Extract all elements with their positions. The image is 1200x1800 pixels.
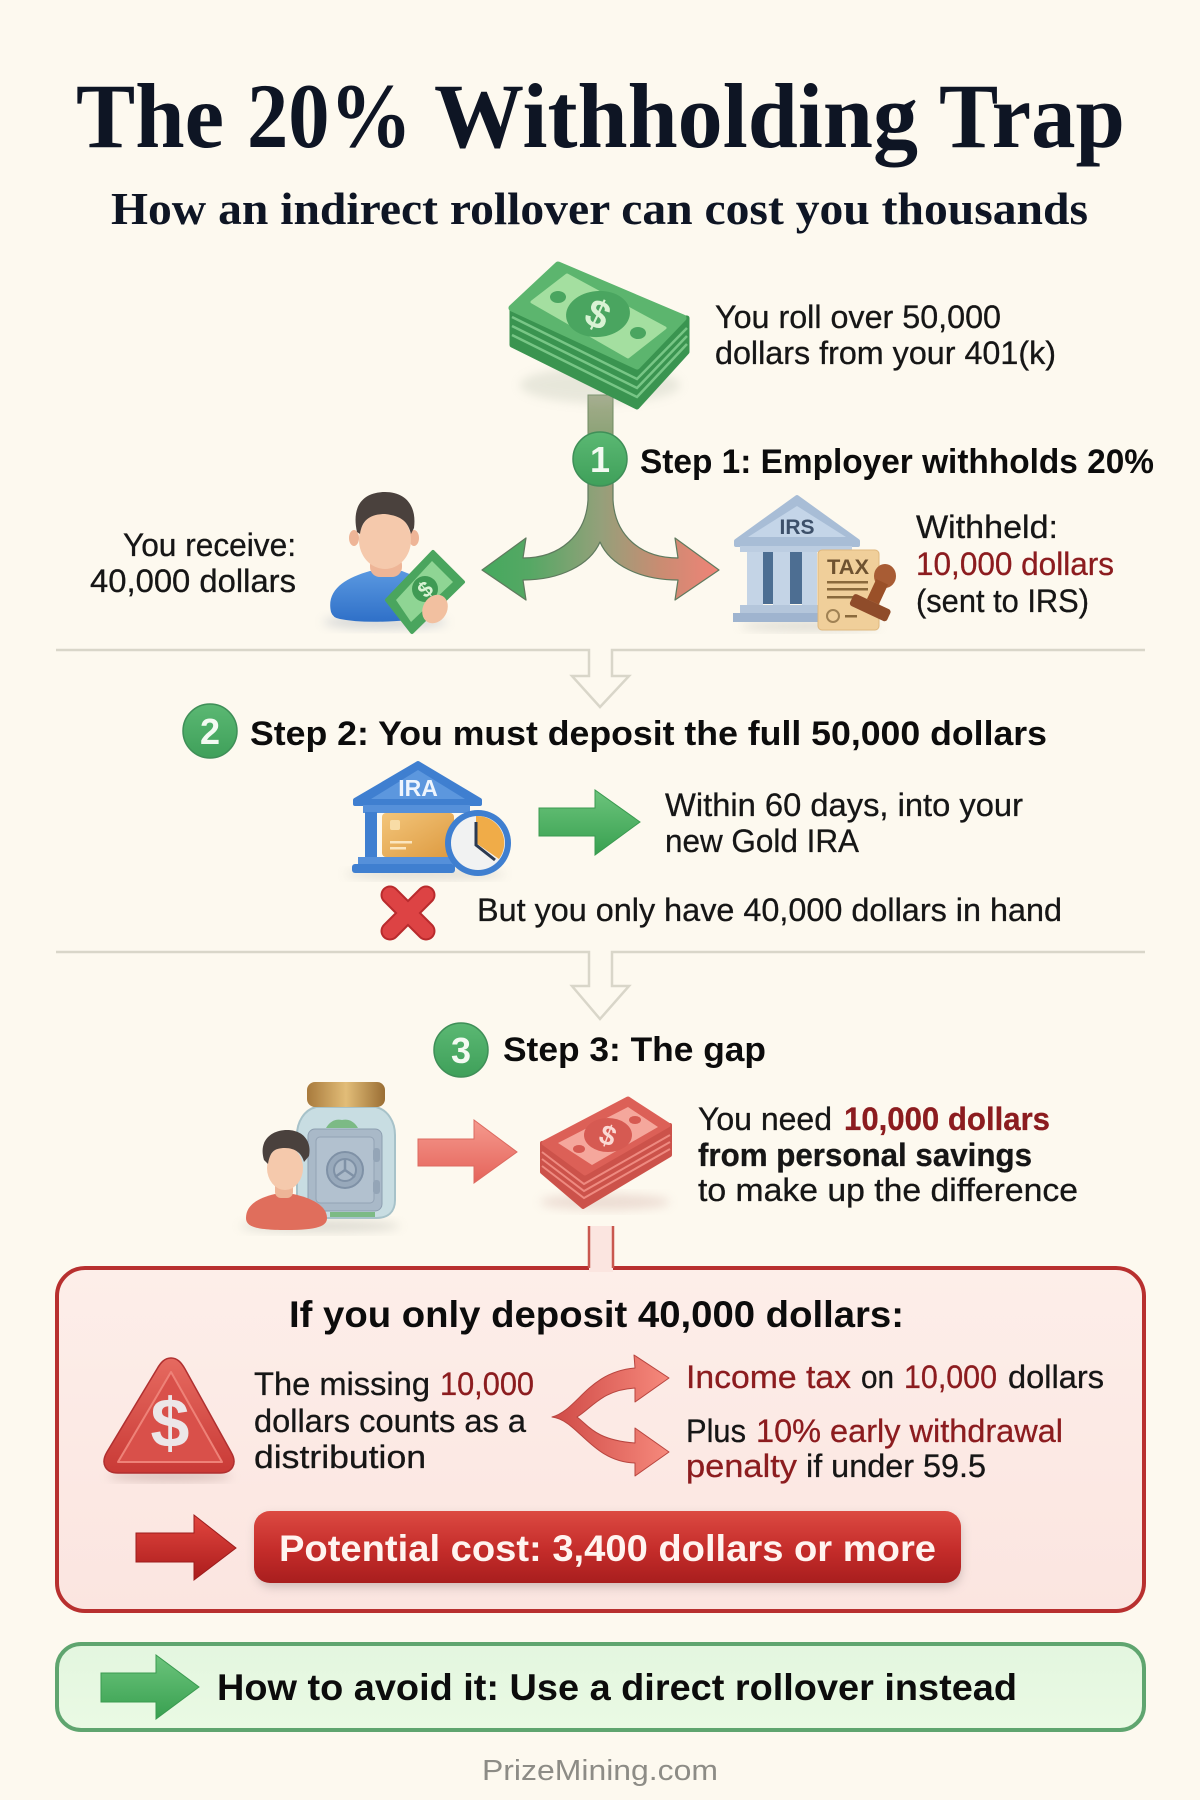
text: you need 10,000: 10,000 dollars (844, 1101, 1050, 1137)
text: withheld: 10,000 dollars (916, 546, 1114, 582)
step 2 heading: Step 2: You must deposit the full 50,000 dollars (250, 715, 1047, 753)
text: withheld: (sent to IRS) (916, 583, 1089, 619)
text: withheld: Withheld: (916, 509, 1058, 545)
title (76, 65, 1125, 167)
safe (308, 1129, 382, 1211)
callout: potential cost button (254, 1511, 961, 1587)
callout: potential cost button: Potential cost: 3,400 dollars or more (279, 1528, 936, 1569)
text: you need 10,000: to make up the difference (698, 1172, 1078, 1208)
text: within 60 days: Within 60 days, into your (665, 787, 1023, 823)
text: missing 10,000: distribution (254, 1439, 426, 1475)
text: direct rollover: How to avoid it: Use a direct rollover instead (217, 1667, 1017, 1708)
arrow: divider 1 with hollow down arrow (56, 650, 1145, 707)
text: roll over: You roll over 50,000 (715, 299, 1001, 335)
clock (445, 810, 511, 876)
text: you need 10,000: from personal savings (698, 1137, 1032, 1173)
icon: IRS building with tax document: IRS (779, 516, 815, 539)
text: you need 10,000 (698, 1101, 1078, 1208)
panel heading: If you only deposit 40,000 dollars: (289, 1294, 904, 1335)
title: The (76, 65, 224, 167)
arrow: divider 2 with hollow down arrow (56, 952, 1145, 1019)
text: early withdrawal penalty (686, 1413, 1063, 1484)
text: within 60 days: new Gold IRA (665, 823, 860, 859)
step 3 badge: 3 (451, 1030, 471, 1071)
step 2 badge (183, 704, 237, 758)
icon: red X (390, 895, 426, 931)
money bill in hand: $ (412, 576, 438, 603)
text: roll over: dollars from your 401(k) (715, 335, 1056, 371)
stamp (849, 564, 896, 622)
arrow: forked red arrows (552, 1355, 669, 1476)
person (246, 1130, 327, 1230)
icon: warning triangle with dollar (104, 1358, 234, 1481)
text: early withdrawal penalty: Plus (686, 1413, 746, 1449)
panel: how to avoid it (57, 1644, 1144, 1730)
arrow: green to IRA (539, 790, 640, 855)
text: missing 10,000: dollars counts as a (254, 1403, 526, 1439)
arrow: dark red (136, 1515, 236, 1580)
title: 20% (247, 65, 412, 167)
arrow: red to money (418, 1120, 517, 1183)
arrow: green (101, 1655, 199, 1719)
panel: if you only deposit 40,000 (57, 1226, 1144, 1611)
icon: IRA bank with card and clock (345, 763, 511, 879)
text: you receive: You receive: (123, 527, 296, 563)
connector into panel (589, 1226, 613, 1272)
step 2 badge: 2 (200, 711, 220, 752)
text: missing 10,000: The missing (254, 1366, 430, 1402)
text: early withdrawal penalty: if under 59.5 (806, 1448, 986, 1484)
title: Withholding (434, 65, 918, 167)
subtitle: How an indirect rollover can cost you thousands (111, 183, 1088, 234)
icon: red money stack: $ (595, 1118, 621, 1153)
text: withheld (916, 509, 1114, 619)
footer: PrizeMining.com (482, 1755, 718, 1787)
step 1 heading: Step 1: Employer withholds 20% (640, 443, 1154, 481)
tax document: TAX (827, 556, 869, 579)
text: income tax: on (861, 1359, 894, 1395)
text: you receive (90, 527, 296, 599)
text: income tax: dollars (1008, 1359, 1104, 1395)
text: you need 10,000: You need (698, 1101, 832, 1137)
icon: person holding money (323, 492, 463, 632)
flow connector: pipe splitting into two arrows (482, 395, 719, 600)
text: income tax: 10,000 (904, 1359, 997, 1395)
text: only have 40,000: But you only have 40,000 dollars in hand (477, 892, 1062, 928)
icon: red money stack (540, 1099, 670, 1210)
step 1 badge (573, 432, 627, 486)
text: missing 10,000 (254, 1366, 534, 1475)
icon: warning triangle with dollar: $ (151, 1384, 189, 1462)
text: missing 10,000: 10,000 (440, 1366, 534, 1402)
icon: IRA bank with card and clock: IRA (398, 775, 438, 801)
text: you receive: 40,000 dollars (90, 563, 296, 599)
text: roll over (715, 299, 1056, 371)
text: within 60 days (665, 787, 1023, 859)
text: income tax: Income tax (686, 1359, 851, 1395)
text: early withdrawal penalty: penalty (686, 1448, 797, 1484)
title: Trap (939, 65, 1125, 167)
icon: green money stack (512, 265, 687, 407)
step 1 badge: 1 (590, 439, 610, 480)
tax document (818, 550, 879, 630)
text: income tax (686, 1359, 1104, 1395)
icon: green money stack: $ (578, 290, 617, 340)
step 3 heading: Step 3: The gap (503, 1031, 766, 1069)
text: early withdrawal penalty: 10% early withdrawal (756, 1413, 1063, 1449)
gold card (382, 813, 454, 857)
icon: IRS building with tax document (733, 497, 896, 631)
step 3 badge (434, 1023, 488, 1077)
icon: savings jar with safe and person (240, 1082, 400, 1232)
